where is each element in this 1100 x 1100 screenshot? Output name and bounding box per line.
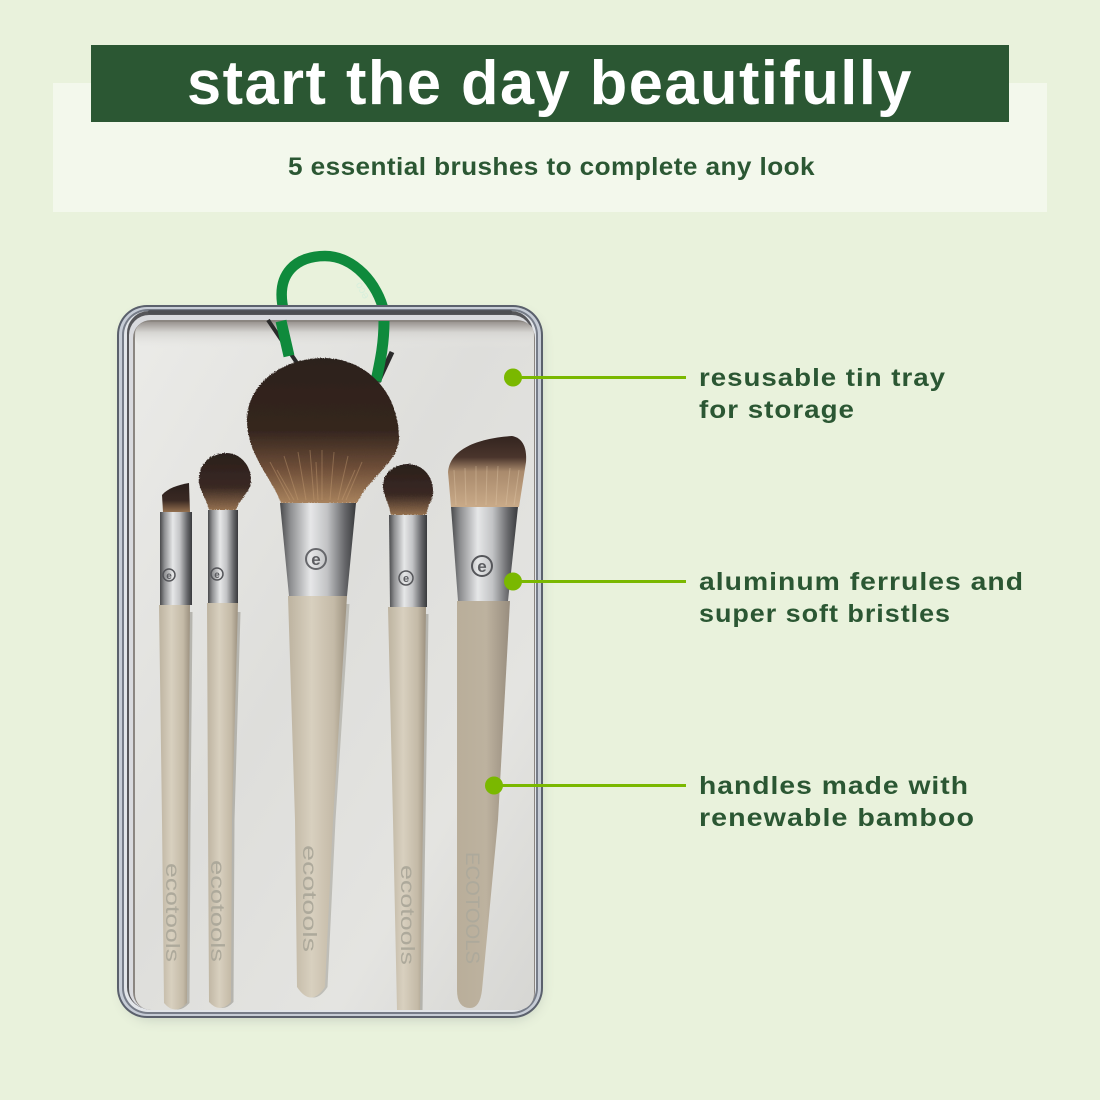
callout: ferrules and bristles: [504, 568, 1024, 628]
icon: green hanging strap: eco: [353, 280, 372, 301]
title banner: start the day beautifully: [187, 49, 913, 118]
icon: green hanging strap: [282, 256, 384, 312]
callout: tin tray: resusable tin tray: [699, 364, 946, 392]
callout: tin tray: for storage: [699, 396, 855, 424]
brush 1: angled liner: [159, 483, 192, 1010]
brush 5: flat foundation brush: e: [477, 557, 487, 576]
brush 3: large powder brush: e: [311, 550, 321, 569]
subtitle panel: [53, 83, 1047, 212]
callout: bamboo handles: renewable bamboo: [699, 804, 975, 832]
callout: bamboo handles: handles made with: [699, 772, 969, 800]
brush 2: round eye brush: [199, 453, 251, 1008]
callout: ferrules and bristles: super soft bristles: [699, 600, 951, 628]
brush 3: large powder brush: ecotools: [298, 845, 319, 952]
icon: strap clips and strap front: [268, 320, 392, 382]
brush 3: large powder brush: [247, 358, 399, 998]
panel: tin tray: [117, 305, 543, 1020]
brush 2: round eye brush: ecotools: [206, 860, 227, 962]
brush 5: flat foundation brush: [448, 436, 526, 1008]
callout: ferrules and bristles: aluminum ferrules and: [699, 568, 1024, 596]
brush 5: flat foundation brush: ECOTOOLS: [461, 852, 482, 964]
brush 2: round eye brush: e: [214, 570, 220, 581]
subtitle: 5 essential brushes to complete any look: [288, 153, 815, 181]
brush 4: small round brush: ecotools: [396, 865, 417, 965]
callout: tin tray: [504, 364, 946, 424]
brush 1: angled liner: e: [166, 571, 172, 582]
brush 4: small round brush: [383, 464, 433, 1010]
brush 1: angled liner: ecotools: [161, 863, 182, 962]
callout: bamboo handles: [485, 772, 975, 832]
brush 4: small round brush: e: [403, 573, 409, 585]
